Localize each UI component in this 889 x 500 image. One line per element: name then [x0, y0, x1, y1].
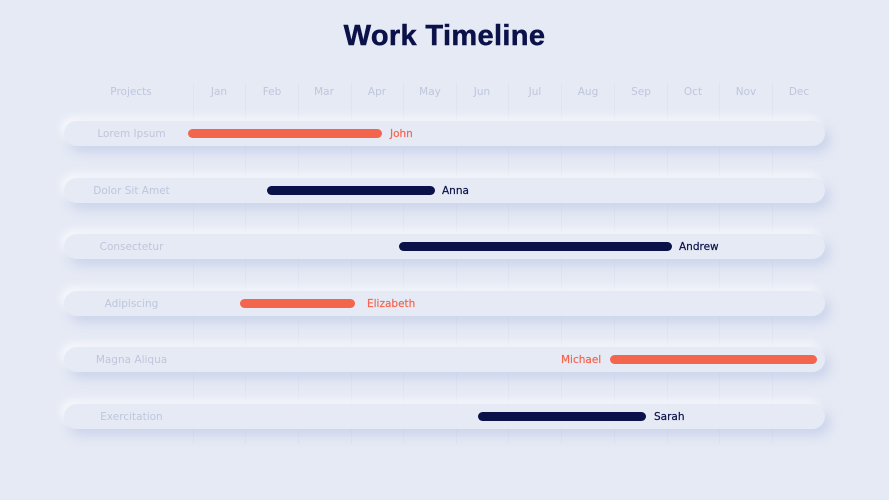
name: Sarah: Sarah	[654, 411, 685, 423]
bar: Anna	[267, 186, 435, 195]
header: projects and months: Feb	[263, 86, 281, 98]
bar: Michael	[610, 355, 817, 364]
row: Lorem Ipsum	[64, 121, 825, 146]
row: Exercitation	[64, 404, 825, 429]
project label: Adipiscing	[105, 298, 158, 310]
name: Andrew: Andrew	[679, 241, 719, 253]
row: Dolor Sit Amet	[64, 178, 825, 203]
bar: Sarah	[478, 412, 646, 421]
name: Michael: Michael	[561, 354, 601, 366]
header: projects and months: Jun	[474, 86, 490, 98]
bar: John	[188, 129, 382, 138]
row: Magna Aliqua	[64, 347, 825, 372]
header: projects and months: Oct	[684, 86, 702, 98]
project label: Magna Aliqua	[96, 354, 167, 366]
header: projects and months: Apr	[368, 86, 386, 98]
bar: Andrew	[399, 242, 672, 251]
header: projects and months: Nov	[736, 86, 756, 98]
project label: Exercitation	[100, 411, 163, 423]
header: projects and months	[110, 86, 809, 98]
row: Consectetur	[64, 234, 825, 259]
project label: Dolor Sit Amet	[93, 185, 170, 197]
name: John: John	[390, 128, 413, 140]
bar: Elizabeth	[240, 299, 355, 308]
name: Anna: Anna	[442, 185, 469, 197]
row: Adipiscing	[64, 291, 825, 316]
project label: Lorem Ipsum	[97, 128, 166, 140]
header: projects and months: Dec	[789, 86, 809, 98]
header: projects and months: Jul	[529, 86, 541, 98]
header: projects and months: Jan	[211, 86, 227, 98]
header: projects and months: Aug	[578, 86, 598, 98]
header: projects and months: May	[419, 86, 441, 98]
header: projects and months: Mar	[314, 86, 334, 98]
header: projects and months: Sep	[631, 86, 651, 98]
title: Work Timeline	[344, 20, 545, 52]
header: projects and months: Projects	[110, 86, 152, 98]
name: Elizabeth: Elizabeth	[367, 298, 415, 310]
project label: Consectetur	[100, 241, 163, 253]
